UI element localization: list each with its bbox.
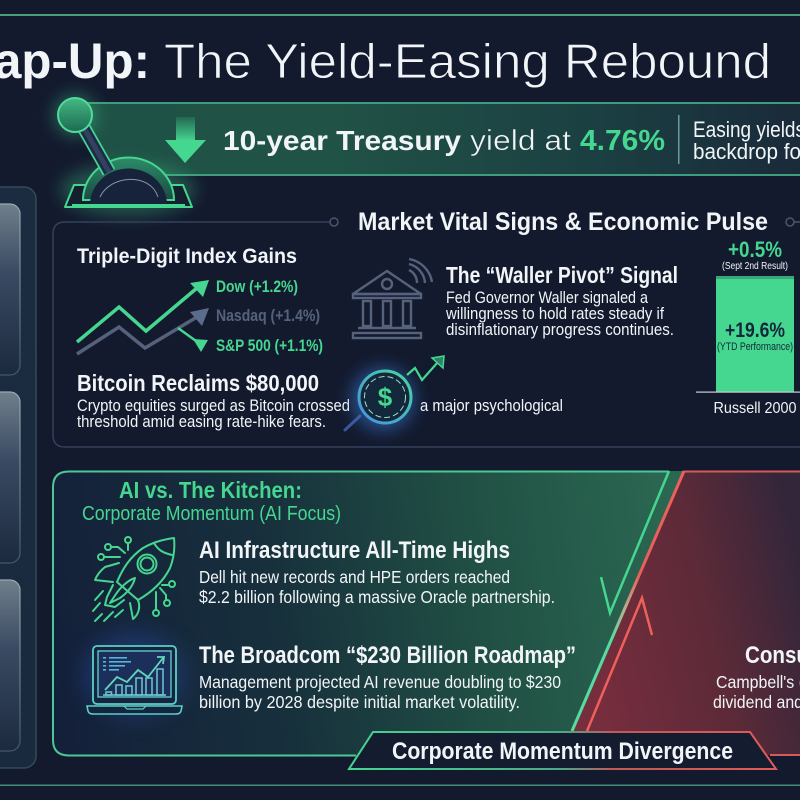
heading: AI vs. the kitchen: Corporate Momentum (AI Focus) — [82, 503, 341, 525]
heading: AI vs. the kitchen: AI vs. The Kitchen: — [119, 477, 302, 503]
chart labels: Nasdaq (+1.4%) — [216, 307, 320, 325]
banner: corporate momentum divergence — [349, 732, 776, 769]
text block: bitcoin: a major psychological — [420, 397, 563, 415]
icon: bitcoin coin with arrow — [345, 356, 444, 431]
bar chart: russell 2000 — [696, 237, 800, 417]
treasury yield statement: 10-year Treasury — [223, 125, 461, 156]
text block: bitcoin: Crypto equities surged as Bitcoin crossed — [77, 397, 350, 415]
icon: laptop chart — [84, 633, 184, 717]
banner: corporate momentum divergence: Corporate Momentum Divergence — [392, 738, 733, 765]
text block: AI infrastructure: $2.2 billion following a massive Oracle partnership. — [199, 587, 555, 607]
icon: lever — [53, 93, 196, 216]
chart labels — [216, 278, 323, 355]
treasury yield statement: 4.76% — [580, 125, 665, 157]
icon: bitcoin coin with arrow: $ — [378, 382, 393, 412]
panel: left side cards — [0, 187, 36, 768]
chart labels: S&P 500 (+1.1%) — [216, 337, 323, 355]
chart labels: Dow (+1.2%) — [216, 278, 298, 296]
text block: waller pivot: The “Waller Pivot” Signal — [446, 262, 678, 288]
icon: rocket — [93, 537, 175, 621]
heading: AI vs. the kitchen — [82, 477, 341, 525]
panel: market vital signs — [53, 218, 800, 447]
treasury yield statement — [223, 125, 665, 157]
text block: consumer — [713, 642, 800, 712]
text block: broadcom roadmap: Management projected AI revenue doubling to $230 — [199, 672, 561, 692]
icon: check mark — [601, 471, 669, 613]
text block: bitcoin — [77, 370, 563, 431]
text block: AI infrastructure: Dell hit new records and HPE orders reached — [199, 567, 510, 587]
treasury yield statement: yield at — [470, 125, 571, 157]
text block: waller pivot: willingness to hold rates steady if — [445, 305, 664, 323]
text block: bitcoin: threshold amid easing rate-hike fears. — [77, 413, 326, 431]
banner note — [693, 117, 800, 164]
bar chart: russell 2000: +19.6% — [725, 319, 785, 342]
panel: AI corporate momentum — [53, 471, 684, 756]
text block: AI infrastructure: AI Infrastructure All-Time Highs — [199, 537, 510, 564]
text block: waller pivot — [445, 262, 678, 339]
icon: down arrow — [165, 117, 206, 163]
title: The Yield-Easing Rebound — [164, 35, 771, 89]
chart: index gains lines — [77, 280, 209, 354]
heading: triple-digit index gains: Triple-Digit Index Gains — [77, 244, 297, 268]
icon: central bank — [353, 259, 432, 338]
text block: bitcoin: Bitcoin Reclaims $80,000 — [77, 370, 319, 396]
text block: AI infrastructure — [199, 537, 555, 607]
text block: broadcom roadmap — [199, 642, 576, 712]
heading: market vital signs: Market Vital Signs & Economic Pulse — [358, 208, 768, 236]
text block: broadcom roadmap: billion by 2028 despite initial market volatility. — [199, 692, 520, 712]
text block: waller pivot: disinflationary progress continues. — [446, 321, 674, 339]
text block: broadcom roadmap: The Broadcom “$230 Billion Roadmap” — [199, 642, 576, 669]
yield banner — [85, 103, 800, 175]
divider: diagonal split — [572, 471, 684, 731]
icon: red caret — [587, 598, 652, 731]
bar chart: russell 2000: +0.5% — [728, 237, 782, 262]
text block: waller pivot: Fed Governor Waller signaled a — [446, 289, 649, 307]
panel: consumer momentum — [561, 471, 800, 755]
